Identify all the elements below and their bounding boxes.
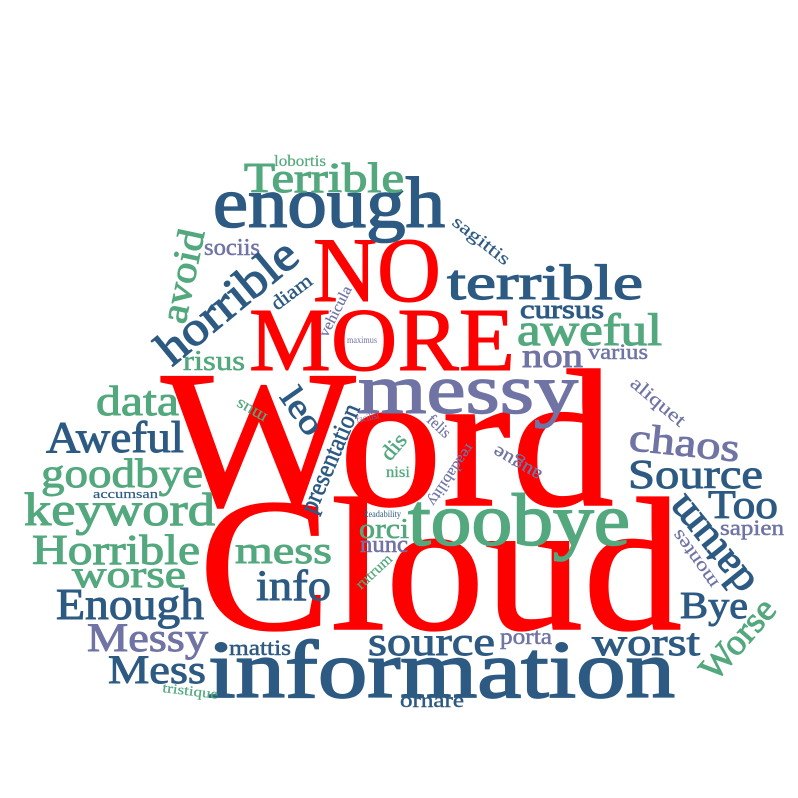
word: readability (rotated): readability — [424, 441, 477, 509]
word: Word: Word — [161, 331, 614, 548]
word: Horrible: Horrible — [32, 528, 200, 574]
word: vehicula (rotated): vehicula — [316, 283, 356, 340]
word: Aweful: Aweful — [46, 413, 184, 462]
word: keyword: keyword — [24, 484, 215, 536]
word: diam (rotated): diam — [267, 269, 317, 315]
word: ornare: ornare — [400, 690, 464, 712]
word: Bye: Bye — [680, 585, 748, 627]
word: Worse (rotated): Worse — [691, 590, 784, 688]
word: MORE: MORE — [249, 291, 515, 390]
word: NO: NO — [313, 219, 441, 321]
word: augue (rotated): augue — [489, 441, 546, 486]
word: montes (rotated): montes — [667, 525, 723, 592]
word: aweful (lowercase): aweful — [517, 304, 662, 355]
word: chaos (rotated): chaos — [627, 414, 742, 471]
word: non: non — [522, 338, 583, 375]
word: Readability: Readability — [363, 509, 401, 519]
word: data: data — [96, 379, 179, 425]
word: nunc: nunc — [360, 532, 408, 558]
word: cursus: cursus — [520, 295, 604, 324]
word: orci: orci — [359, 514, 409, 545]
word: Mess: Mess — [108, 647, 206, 692]
word: lobortis: lobortis — [274, 153, 326, 170]
word: sagittis (rotated): sagittis — [449, 211, 514, 269]
word: horrible (rotated): horrible — [145, 228, 309, 375]
word: information: information — [208, 624, 675, 715]
word: facilisi (rotated): facilisi — [355, 410, 380, 426]
word: messy: messy — [358, 352, 578, 429]
word: datum (rotated): datum — [656, 486, 765, 605]
word: varius: varius — [588, 339, 648, 364]
word: mus (rotated): mus — [232, 395, 270, 428]
word: porta: porta — [500, 624, 552, 649]
word: terrible (lowercase): terrible — [447, 254, 643, 310]
word: Terrible: Terrible — [244, 156, 404, 202]
word: aliquet (rotated): aliquet — [626, 373, 691, 432]
word: presentation (rotated): presentation — [294, 399, 366, 517]
word: avoid (rotated): avoid — [153, 225, 214, 327]
word: dis (rotated): dis — [375, 428, 412, 465]
word: Messy: Messy — [87, 615, 208, 660]
word: source (lowercase): source — [368, 619, 495, 664]
word: maximus: maximus — [347, 335, 377, 345]
word: sociis: sociis — [204, 235, 260, 261]
word: sapien: sapien — [720, 515, 784, 540]
word: leo (rotated): leo — [272, 380, 331, 443]
word: worse (lowercase): worse — [72, 554, 186, 596]
word: Enough: Enough — [56, 580, 204, 629]
word: worst: worst — [592, 622, 701, 664]
word: toobye: toobye — [408, 480, 630, 562]
word: Cloud: Cloud — [199, 461, 682, 671]
word: enough: enough — [213, 163, 445, 243]
word: goodbye: goodbye — [41, 450, 203, 496]
word: mess (lowercase): mess — [235, 530, 332, 572]
word: Source: Source — [628, 451, 763, 497]
word: accumsan: accumsan — [93, 486, 159, 501]
word: rutrum (rotated): rutrum — [353, 551, 396, 593]
word: mattis: mattis — [229, 635, 291, 660]
word: risus: risus — [183, 346, 245, 377]
word: Too: Too — [708, 482, 778, 527]
word: felis (rotated): felis — [423, 411, 454, 442]
word: tristique (rotated): tristique — [162, 681, 219, 703]
word: info: info — [256, 563, 331, 610]
word: nisi: nisi — [386, 464, 411, 481]
